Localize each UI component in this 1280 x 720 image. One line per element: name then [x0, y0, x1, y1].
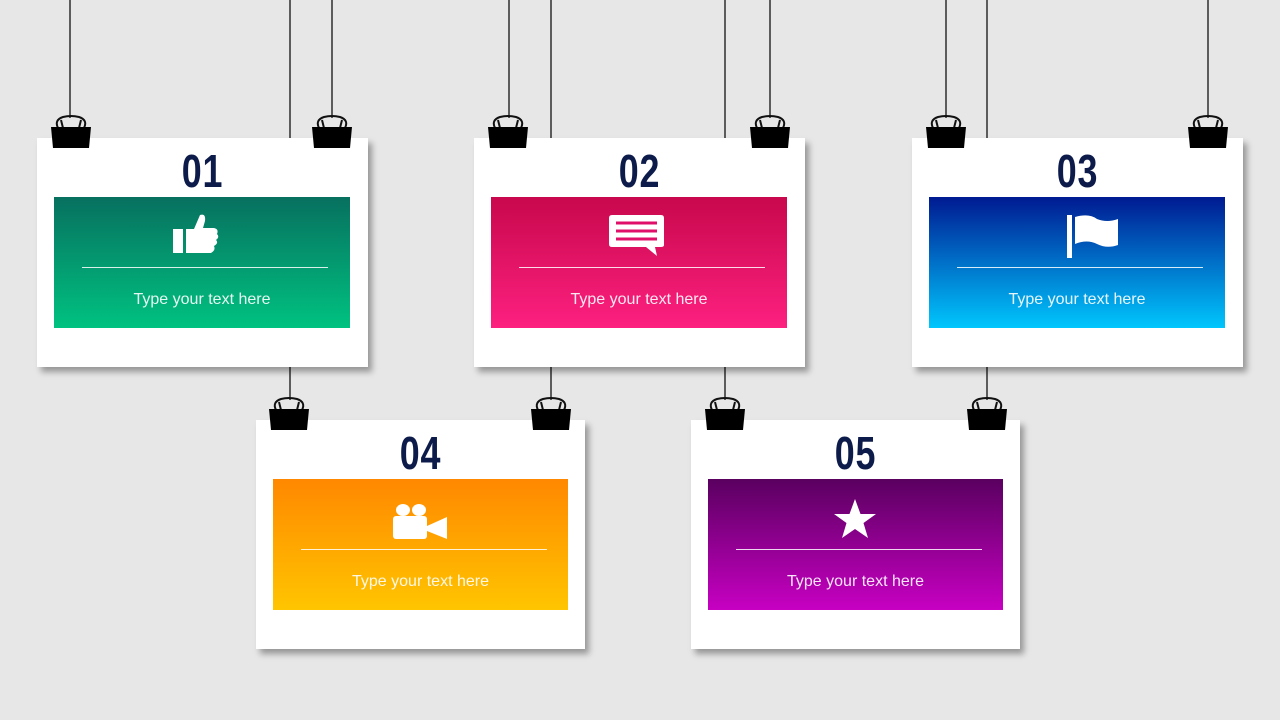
card 01: Type your text here: [134, 291, 270, 308]
card 02: 02: [619, 145, 660, 197]
card 05: [691, 420, 1020, 649]
card 04: [256, 420, 585, 649]
card 05: 05: [835, 427, 876, 479]
card 04: 04: [400, 427, 441, 479]
card 01: 01: [182, 145, 223, 197]
card 03: 03: [1057, 145, 1098, 197]
card 02: [474, 138, 805, 367]
card 05: Type your text here: [787, 573, 924, 590]
card 02: Type your text here: [571, 291, 707, 308]
icon: flag: [1067, 215, 1118, 258]
icon: video camera: [393, 504, 447, 539]
icon: chat: [609, 215, 664, 256]
card 03: Type your text here: [1009, 291, 1145, 308]
icon: star: [834, 499, 876, 538]
icon: thumbs up: [173, 214, 218, 253]
card 01: [37, 138, 368, 367]
card 03: [912, 138, 1243, 367]
card 04: Type your text here: [352, 573, 489, 590]
